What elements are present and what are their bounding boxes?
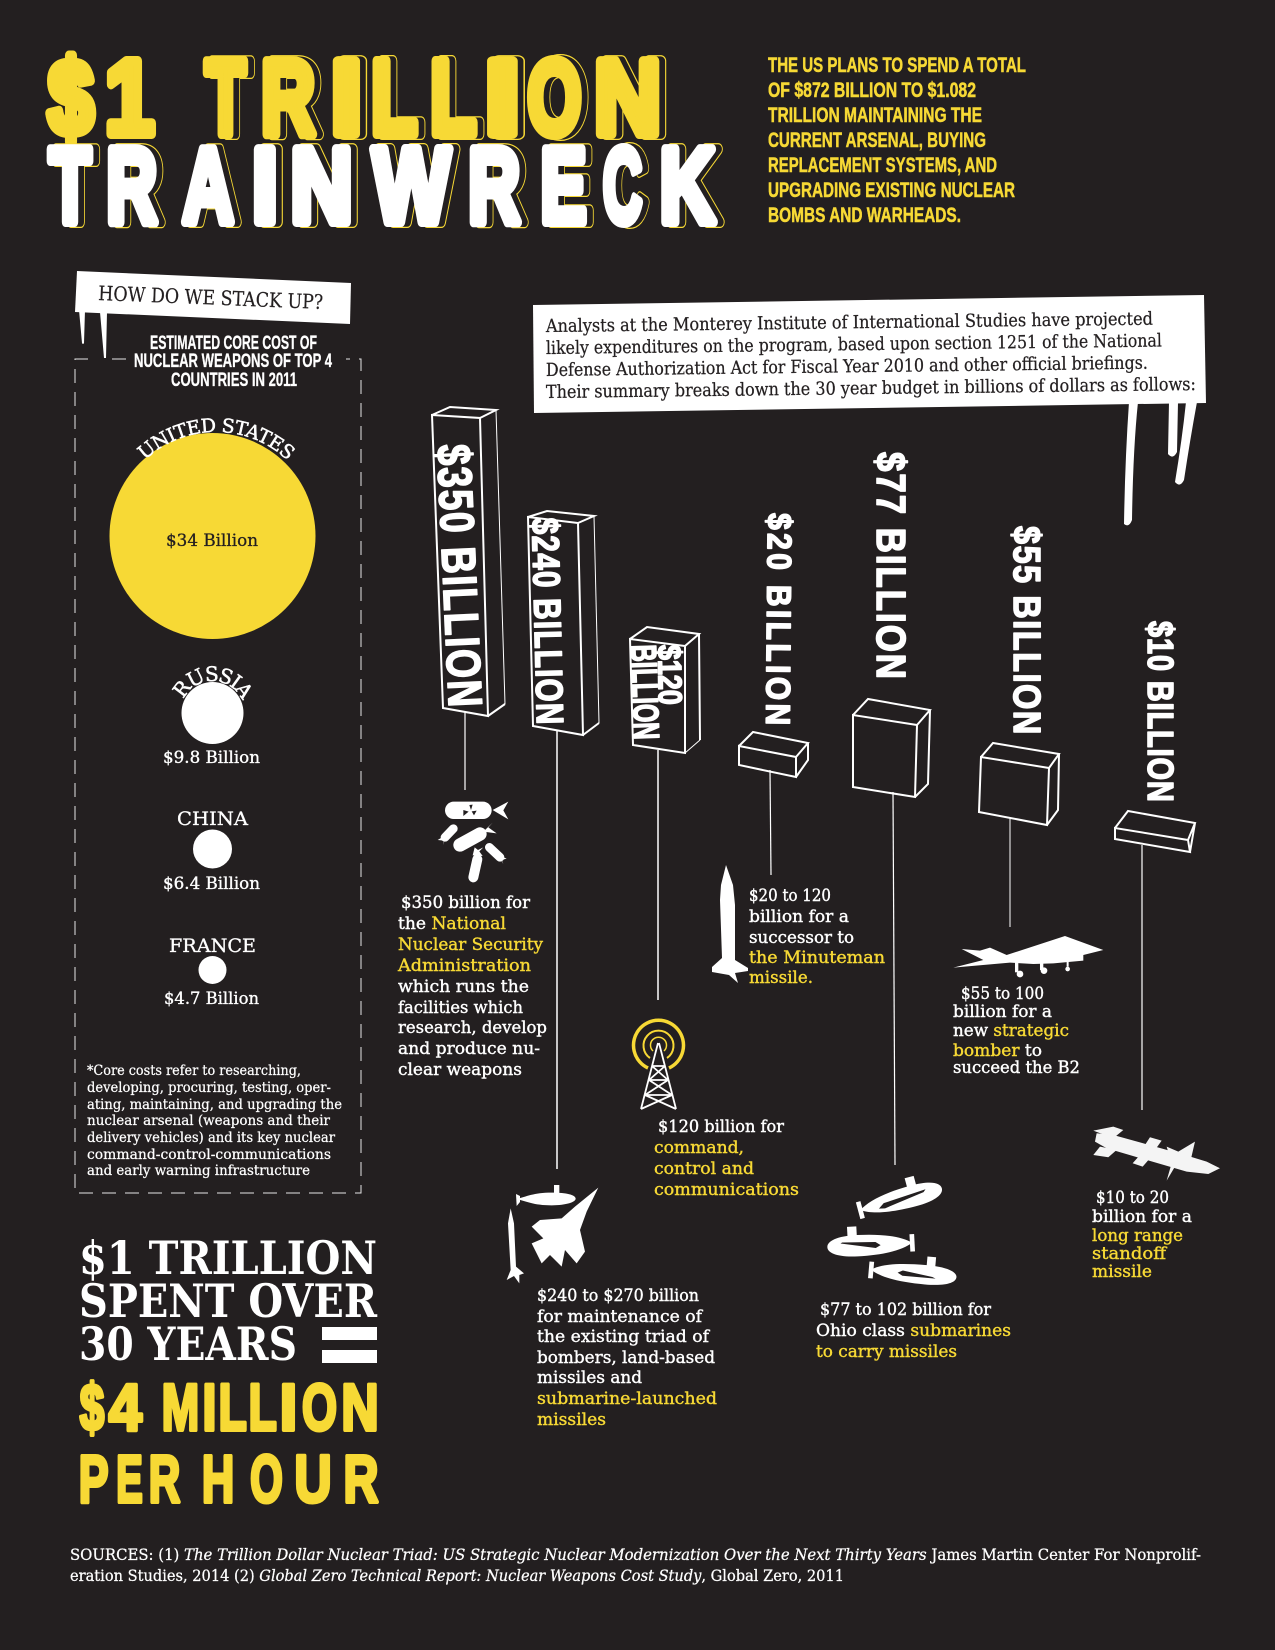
text: command control communications: command,	[654, 1138, 744, 1158]
text: national nuclear security administration: and produce nu-	[398, 1039, 540, 1059]
sources	[70, 1546, 1201, 1585]
text: strategic bomber: new strategic	[953, 1021, 1069, 1041]
footnote: nuclear arsenal (weapons and their	[87, 1113, 331, 1129]
title line: $1 trillion: L	[436, 39, 482, 157]
bar: $240 billion	[523, 511, 599, 1169]
text: national nuclear security administration: which runs the	[398, 977, 529, 997]
text: minuteman successor: the Minuteman	[749, 948, 885, 968]
sources: SOURCES: (1) The Trillion Dollar Nuclear Triad: US Strategic Nuclear Modernization Over the Next Thirty Years James Martin Center For Nonprolif-	[70, 1546, 1201, 1564]
text: maintenance of triad: missiles and	[537, 1368, 642, 1388]
title line: trainwreck: A	[182, 127, 234, 245]
intro text: THE US PLANS TO SPEND A TOTAL	[768, 54, 1026, 77]
footnote: developing, procuring, testing, oper-	[87, 1080, 331, 1096]
title line: trainwreck: C	[609, 127, 648, 245]
icon: triad submarine, jet and missile	[507, 1185, 598, 1283]
intro text: TRILLION MAINTAINING THE	[768, 104, 982, 127]
text: minuteman successor	[749, 886, 885, 988]
text: ohio class submarines: Ohio class submarines	[816, 1321, 1011, 1341]
russia circle: RUSSIA	[172, 666, 251, 701]
dashed comparison panel	[75, 359, 361, 1193]
analysts note: likely expenditures on the program, based upon section 1251 of the National	[546, 330, 1162, 359]
text: strategic bomber: $55 to 100	[961, 984, 1044, 1004]
footnote: and early warning infrastructure	[87, 1163, 310, 1179]
text: long range standoff missile: missile	[1092, 1262, 1152, 1282]
title line: trainwreck: K	[666, 127, 721, 245]
callout: $1 trillion over 30 years: I	[280, 1370, 297, 1444]
title line: $1 trillion: L	[430, 39, 476, 157]
text: maintenance of triad: missiles	[537, 1410, 606, 1430]
text: command control communications: $120 billion for	[658, 1117, 785, 1137]
title line: trainwreck: I	[258, 127, 284, 245]
title line: trainwreck: A	[188, 127, 240, 245]
title line: trainwreck: E	[546, 127, 592, 245]
text: long range standoff missile: long range	[1092, 1226, 1183, 1246]
france circle: FRANCE	[169, 935, 256, 957]
text: long range standoff missile: standoff	[1092, 1244, 1168, 1264]
title line: $1 trillion: R	[261, 39, 315, 157]
text: national nuclear security administration	[397, 893, 547, 1080]
title	[48, 39, 721, 245]
intro text	[768, 54, 1026, 227]
united states circle	[110, 418, 316, 639]
title line: $1 trillion: T	[211, 39, 252, 157]
text: maintenance of triad	[537, 1286, 717, 1430]
title line: $1 trillion: 1	[105, 39, 154, 157]
title line: $1 trillion: R	[267, 39, 321, 157]
text: minuteman successor: billion for a	[749, 907, 849, 927]
banner: how do we stack up	[75, 271, 351, 358]
icon: cruise missile	[1093, 1127, 1220, 1181]
title line: $1 trillion: O	[533, 39, 588, 157]
title line: $1 trillion: O	[527, 39, 582, 157]
title line: $1 trillion: I	[330, 39, 362, 157]
text: national nuclear security administration: research, develop	[398, 1018, 547, 1038]
analysts note	[533, 295, 1206, 525]
bar: $55 billion	[979, 526, 1059, 927]
text: strategic bomber: billion for a	[953, 1002, 1052, 1022]
banner: how do we stack up: HOW DO WE STACK UP?	[98, 281, 324, 314]
title line: trainwreck: K	[666, 127, 721, 245]
text: national nuclear security administration: the National	[398, 914, 506, 934]
text: maintenance of triad: for maintenance of	[537, 1307, 704, 1327]
callout: $1 trillion over 30 years: N	[341, 1370, 379, 1444]
title line: $1 trillion: T	[211, 39, 252, 157]
text: maintenance of triad: bombers, land-based	[537, 1348, 715, 1368]
text: strategic bomber: succeed the B2	[953, 1058, 1080, 1078]
text: national nuclear security administration: Nuclear Security	[398, 935, 543, 955]
callout: $1 trillion over 30 years: U	[294, 1442, 332, 1517]
icon: strategic bomber	[953, 936, 1103, 977]
text: ohio class submarines: to carry missiles	[816, 1342, 957, 1362]
title line: trainwreck: R	[112, 127, 163, 245]
title line: trainwreck: E	[540, 127, 586, 245]
title line: $1 trillion: T	[205, 39, 246, 157]
callout: $1 trillion over 30 years: I	[202, 1370, 216, 1444]
france circle: $4.7 Billion	[164, 989, 259, 1009]
bar: $55 billion: $55 BILLION	[1005, 526, 1047, 734]
title line: trainwreck: C	[609, 127, 648, 245]
title line: $1 trillion: I	[484, 39, 520, 157]
text: maintenance of triad: $240 to $270 billion	[537, 1286, 699, 1306]
title line: $1 trillion: I	[490, 39, 526, 157]
callout: $1 trillion over 30 years: 4	[109, 1370, 142, 1444]
footnote	[87, 1063, 342, 1179]
callout: $1 trillion over 30 years: E	[116, 1442, 143, 1517]
analysts note: Defense Authorization Act for Fiscal Year 2010 and other official briefings.	[546, 353, 1148, 381]
intro text: BOMBS AND WARHEADS.	[768, 204, 961, 227]
text: maintenance of triad: the existing triad of	[537, 1327, 711, 1347]
intro text: OF $872 BILLION TO $1.082	[768, 79, 976, 102]
bar: $120 billion: $120	[651, 644, 689, 705]
china circle	[163, 808, 260, 894]
text: long range standoff missile: billion for a	[1092, 1207, 1192, 1227]
intro text: CURRENT ARSENAL, BUYING	[768, 129, 986, 152]
callout: $1 trillion over 30 years: $	[80, 1370, 104, 1444]
text: national nuclear security administration: Administration	[397, 956, 531, 976]
title line: trainwreck: I	[258, 127, 284, 245]
submarine one	[853, 1170, 945, 1221]
text: long range standoff missile	[1092, 1188, 1192, 1282]
intro text: UPGRADING EXISTING NUCLEAR	[768, 179, 1015, 202]
title line: $1 trillion: O	[533, 39, 588, 157]
title line: $1 trillion: N	[600, 39, 667, 157]
bar: $20 billion: $20 BILLION	[759, 513, 799, 725]
callout: $1 trillion over 30 years: O	[250, 1442, 283, 1517]
callout: $1 trillion over 30 years: R	[149, 1442, 180, 1517]
title line: trainwreck: T	[55, 127, 97, 245]
united states circle: $34 Billion	[166, 531, 258, 551]
text: national nuclear security administration: facilities which	[398, 998, 523, 1018]
text: command control communications: control and	[654, 1159, 754, 1179]
title line: trainwreck: N	[296, 127, 359, 245]
text: minuteman successor: missile.	[749, 968, 813, 988]
icon: minuteman missile	[712, 865, 748, 983]
callout: $1 trillion over 30 years: L	[249, 1370, 277, 1444]
callout: $1 trillion over 30 years: O	[302, 1370, 337, 1444]
icon: submarines	[826, 1170, 958, 1287]
text: maintenance of triad: submarine-launched	[537, 1389, 717, 1409]
footnote: ating, maintaining, and upgrading the	[87, 1097, 342, 1113]
bar: $10 billion: $10 BILLION	[1140, 621, 1181, 802]
callout: $1 trillion over 30 years: L	[219, 1370, 247, 1444]
panel heading: estimated core cost: ESTIMATED CORE COST OF	[150, 333, 317, 354]
title line: trainwreck: T	[49, 127, 91, 245]
title line: $1 trillion	[48, 39, 667, 157]
title line: $1 trillion: L	[436, 39, 482, 157]
text: ohio class submarines: $77 to 102 billion for	[820, 1300, 992, 1320]
title line: $1 trillion: I	[336, 39, 368, 157]
bar: $77 billion	[853, 452, 930, 1165]
sources: eration Studies, 2014 (2) Global Zero Technical Report: Nuclear Weapons Cost Study, Global Zero, 2011	[70, 1567, 844, 1585]
title line: trainwreck: N	[290, 127, 353, 245]
text: minuteman successor: $20 to 120	[749, 886, 831, 906]
russia circle: $9.8 Billion	[163, 748, 260, 768]
callout: $1 trillion over 30 years: $1 TRILLION	[79, 1231, 377, 1285]
title line: trainwreck: R	[474, 127, 526, 245]
submarine two	[826, 1223, 915, 1258]
china circle: $6.4 Billion	[163, 874, 260, 894]
title line: $1 trillion: L	[377, 39, 423, 157]
text: minuteman successor: successor to	[749, 928, 854, 948]
bar: $77 billion: $77 BILLION	[867, 452, 913, 679]
title line: trainwreck: R	[112, 127, 163, 245]
title line: $1 trillion: I	[490, 39, 526, 157]
title line: trainwreck: R	[106, 127, 157, 245]
footnote: delivery vehicles) and its key nuclear	[87, 1130, 336, 1146]
callout: $1 trillion over 30 years: SPENT OVER	[79, 1274, 378, 1328]
title line: trainwreck: W	[379, 127, 456, 245]
text: strategic bomber: bomber to	[953, 1041, 1042, 1061]
title line: trainwreck	[49, 127, 721, 245]
title line: $1 trillion: N	[594, 39, 661, 157]
bar: $20 billion	[739, 513, 808, 875]
callout: $1 trillion over 30 years: H	[202, 1442, 234, 1517]
callout: $1 trillion over 30 years: R	[344, 1442, 378, 1517]
text: command control communications	[654, 1117, 799, 1200]
callout: $1 trillion over 30 years	[79, 1231, 379, 1517]
title line: $1 trillion: L	[377, 39, 423, 157]
text: national nuclear security administration: $350 billion for	[401, 893, 531, 913]
panel heading: estimated core cost	[134, 333, 332, 391]
title line: trainwreck: W	[379, 127, 456, 245]
footnote: command-control-communications	[87, 1147, 331, 1163]
text: strategic bomber	[953, 984, 1080, 1078]
bar: $350 billion	[426, 407, 505, 790]
title line: $1 trillion: $	[48, 39, 94, 157]
callout: $1 trillion over 30 years: P	[79, 1442, 108, 1517]
analysts note: Analysts at the Monterey Institute of International Studies have projected	[545, 309, 1153, 337]
title line: $1 trillion: L	[371, 39, 417, 157]
title line: $1 trillion: R	[267, 39, 321, 157]
analysts note: Their summary breaks down the 30 year budget in billions of dollars as follows:	[546, 374, 1196, 403]
france circle	[164, 935, 259, 1009]
icon: bombs	[438, 802, 508, 877]
bar: $240 billion: $240 BILLION	[523, 517, 570, 725]
title line: trainwreck: N	[296, 127, 359, 245]
callout: $1 trillion over 30 years: 30 YEARS	[79, 1317, 297, 1371]
icon: radio tower	[634, 1020, 684, 1109]
title line: trainwreck: W	[373, 127, 450, 245]
united states circle: UNITED STATES	[136, 418, 296, 458]
text: long range standoff missile: $10 to 20	[1096, 1188, 1169, 1208]
title line: trainwreck: A	[188, 127, 240, 245]
bar: $120 billion	[623, 627, 700, 1000]
bar: $10 billion	[1115, 621, 1195, 1110]
footnote: *Core costs refer to researching,	[87, 1063, 301, 1079]
title line: trainwreck: E	[546, 127, 592, 245]
intro text: REPLACEMENT SYSTEMS, AND	[768, 154, 997, 177]
submarine three	[868, 1252, 958, 1287]
text: national nuclear security administration: clear weapons	[398, 1060, 522, 1080]
bar: $120 billion: BILLION	[623, 644, 667, 740]
bar: $350 billion: $350 BILLION	[426, 443, 491, 708]
panel heading: estimated core cost: COUNTRIES IN 2011	[171, 370, 297, 391]
text: command control communications: communications	[654, 1180, 799, 1200]
text: ohio class submarines	[816, 1300, 1011, 1362]
panel heading: estimated core cost: NUCLEAR WEAPONS OF TOP 4	[134, 351, 332, 372]
title line: trainwreck: K	[660, 127, 715, 245]
russia circle	[163, 666, 260, 768]
title line: $1 trillion: I	[336, 39, 368, 157]
china circle: CHINA	[177, 808, 248, 830]
callout: $1 trillion over 30 years: M	[162, 1370, 199, 1444]
title line: trainwreck: I	[252, 127, 278, 245]
title line: trainwreck: C	[603, 127, 642, 245]
title line: $1 trillion: N	[600, 39, 667, 157]
title line: trainwreck: R	[474, 127, 526, 245]
title line: trainwreck: R	[468, 127, 520, 245]
title line: trainwreck: T	[55, 127, 97, 245]
